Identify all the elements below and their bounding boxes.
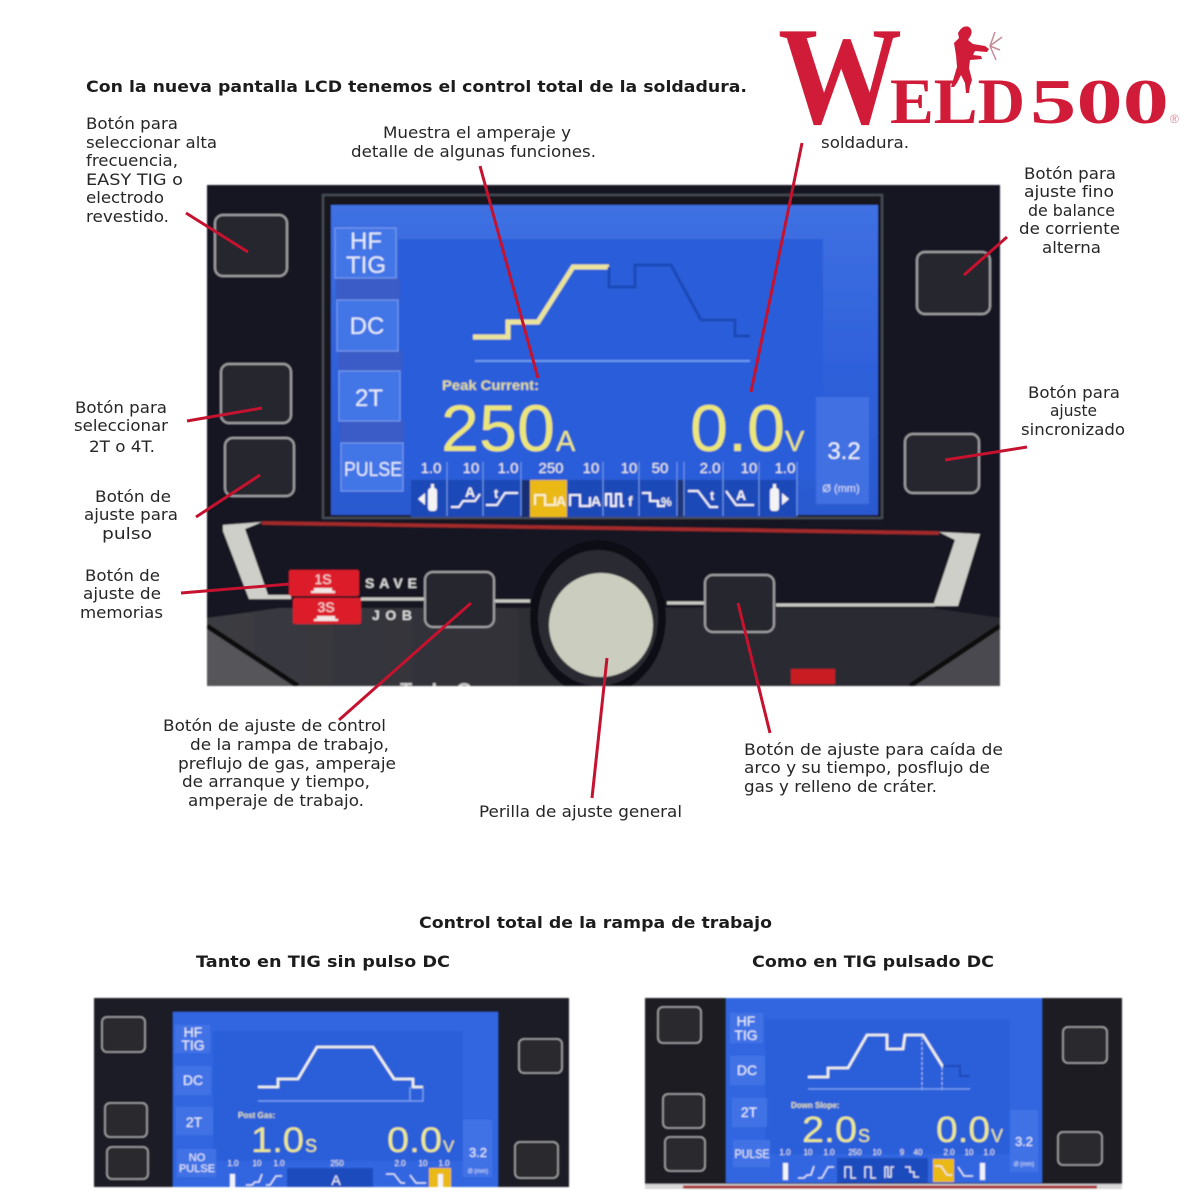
label: synchronized adjust: Botón para: [1028, 383, 1120, 402]
section heading: Control total de la rampa de trabajo: [419, 913, 772, 932]
thumbnail panel: TIG without pulse: 1.0: [227, 1159, 239, 1168]
label: high frequency button: revestido.: [86, 207, 169, 226]
logo: Weld500: ®: [1170, 112, 1179, 126]
thumbnail panel: pulsed TIG: 1.0: [779, 1148, 791, 1157]
save/job button: [425, 572, 494, 627]
thumbnail panel: pulsed TIG: 10: [873, 1148, 882, 1157]
parameter values row: 1.0: [498, 460, 518, 477]
thumbnail panel: pulsed TIG: 40: [914, 1148, 923, 1157]
electrode diameter box: 3.2: [827, 438, 861, 465]
thumbnail panel: pulsed TIG: 3.2: [1015, 1134, 1033, 1149]
label: down slope button: arco y su tiempo, posflujo de: [744, 758, 990, 777]
label: work ramp button: de la rampa de trabajo,: [190, 735, 389, 754]
label: pulse button: Botón de: [95, 487, 171, 506]
welding ramp graph: [473, 265, 750, 361]
thumbnail panel: pulsed TIG: [645, 998, 1122, 1189]
thumbnail panel: TIG without pulse: V: [443, 1137, 455, 1156]
parameter icons row: A: [556, 493, 566, 509]
thumbnail panel: pulsed TIG: V: [991, 1126, 1003, 1146]
parameter icons row: A: [736, 487, 746, 503]
parameter values row: 10: [741, 460, 757, 477]
thumbnail panel: TIG without pulse: A: [331, 1172, 341, 1188]
label: down slope button: Botón de ajuste para caída de: [744, 740, 1003, 759]
parameter values row: 250: [538, 460, 564, 477]
save and job labels: SAVE: [365, 575, 417, 591]
label: high frequency button: [86, 114, 217, 226]
main control panel photo: [207, 185, 1000, 702]
sub heading left: Tanto en TIG sin pulso DC: [196, 952, 450, 971]
parameter values row: 10: [463, 460, 479, 477]
thumbnail panel: TIG without pulse: 2.0: [394, 1159, 406, 1168]
screen mode buttons: DC: [350, 313, 384, 340]
parameter values row: 10: [621, 460, 637, 477]
thumbnail panel: pulsed TIG: 10: [804, 1148, 813, 1157]
label: synchronized adjust: ajuste: [1050, 401, 1097, 420]
parameter values row: 2.0: [700, 460, 720, 477]
label: memory button: Botón de: [85, 566, 160, 585]
thumbnail panel: pulsed TIG: DC: [737, 1062, 757, 1078]
label: high frequency button: electrodo: [86, 188, 164, 207]
label: down slope button: gas y relleno de cráter.: [744, 777, 937, 796]
thumbnail panel: TIG without pulse: S: [305, 1136, 317, 1156]
parameter values row: 10: [583, 460, 599, 477]
side buttons: [215, 215, 990, 496]
label: AC balance button: de balance: [1028, 201, 1115, 220]
label: AC balance button: alterna: [1042, 238, 1101, 257]
label: amperage display: detalle de algunas funciones.: [351, 142, 596, 161]
label: memory button: ajuste de: [83, 584, 161, 603]
lower control strip frame: [223, 522, 980, 606]
thumbnail panel: TIG without pulse: DC: [183, 1072, 203, 1088]
electrode diameter box: [816, 397, 869, 504]
thumbnail panel: TIG without pulse: HF: [184, 1024, 202, 1040]
label: work ramp button: [163, 716, 396, 810]
thumbnail panel: pulsed TIG: 2.0: [802, 1109, 857, 1150]
label: work ramp button: Botón de ajuste de control: [163, 716, 386, 735]
thumbnail panel: pulsed TIG: 1.0: [823, 1148, 835, 1157]
label: amperage display: Muestra el amperaje y: [383, 123, 571, 142]
label: AC balance button: ajuste fino: [1024, 182, 1114, 201]
amperage reading: A: [556, 426, 576, 458]
adjust button: [705, 575, 774, 632]
parameter values row: 1.0: [775, 460, 795, 477]
thumbnail panel: pulsed TIG: 10: [965, 1148, 974, 1157]
screen mode buttons: PULSE: [344, 459, 402, 481]
label: AC balance button: Botón para: [1024, 164, 1116, 183]
parameter icons row: A: [465, 484, 475, 500]
thumbnail panel: TIG without pulse: 2T: [186, 1114, 203, 1130]
thumbnail panel: TIG without pulse: 250: [330, 1159, 344, 1168]
thumbnail panel: pulsed TIG: 2.0: [943, 1148, 955, 1157]
thumbnail panel: TIG without pulse: TIG: [181, 1037, 205, 1053]
thumbnail panel: TIG without pulse: 10: [253, 1159, 262, 1168]
partial model lettering at panel edge: TIG: [400, 680, 472, 702]
label: welding voltage: soldadura.: [821, 133, 909, 152]
thumbnail panel: pulsed TIG: S: [858, 1126, 870, 1146]
LCD screen: [323, 195, 882, 518]
screen mode buttons: 2T: [355, 385, 383, 412]
parameter icons row: f: [628, 493, 633, 509]
logo: Weld500: 500: [1030, 66, 1169, 137]
label: 2T or 4T button: [74, 398, 168, 456]
thumbnail panel: pulsed TIG: TIG: [734, 1027, 758, 1043]
voltage reading: V: [785, 426, 805, 458]
label: high frequency button: Botón para: [86, 114, 178, 133]
screen mode buttons: HF: [350, 228, 382, 255]
knob: [530, 540, 666, 696]
label: general knob: Perilla de ajuste general: [479, 802, 682, 821]
label: amperage display: [351, 123, 596, 161]
parameter icons row: t: [710, 488, 715, 503]
label: memory button: [80, 566, 163, 622]
sub heading right: Como en TIG pulsado DC: [752, 952, 994, 971]
thumbnail panel: TIG without pulse: 3.2: [469, 1145, 487, 1160]
parameter values row: [421, 460, 795, 477]
thumbnail panel: pulsed TIG: HF: [737, 1013, 755, 1029]
thumbnail panel: TIG without pulse: [94, 998, 569, 1188]
logo: Weld500: [778, 0, 1179, 154]
label: AC balance button: de corriente: [1019, 219, 1120, 238]
label: work ramp button: preflujo de gas, amperaje: [178, 754, 396, 773]
thumbnail panel: pulsed TIG: 9: [900, 1148, 905, 1157]
label: work ramp button: de arranque y tiempo,: [182, 772, 370, 791]
thumbnail panel: pulsed TIG: 1.0: [983, 1148, 995, 1157]
electrode diameter box: Ø (mm): [822, 483, 860, 495]
label: pulse button: ajuste para: [84, 505, 178, 524]
thumbnail panel: pulsed TIG: PULSE: [734, 1147, 770, 1161]
annotation leader lines: [181, 143, 1027, 798]
label: pulse button: [84, 487, 178, 543]
thumbnail panel: TIG without pulse: PULSE: [179, 1163, 215, 1175]
voltage reading: 0.0: [690, 391, 785, 465]
red tag: [791, 669, 835, 684]
thumbnail panel: pulsed TIG: Ø (mm): [1014, 1162, 1034, 1168]
parameter icons row: t: [494, 486, 499, 501]
label: memory button: memorias: [80, 603, 163, 622]
thumbnail panel: TIG without pulse: Ø (mm): [468, 1169, 488, 1175]
thumbnail panel: TIG without pulse: NO: [189, 1152, 206, 1164]
label: AC balance button: [1019, 164, 1120, 257]
label: synchronized adjust: [1021, 383, 1125, 439]
screen mode buttons: TIG: [346, 252, 386, 279]
red memory buttons: 3S: [317, 599, 335, 615]
peak current readout: Peak Current:: [442, 377, 539, 393]
label: 2T or 4T button: 2T o 4T.: [89, 437, 155, 456]
parameter values row: 1.0: [421, 460, 441, 477]
thumbnail panel: TIG without pulse: 10: [419, 1159, 428, 1168]
label: 2T or 4T button: seleccionar: [74, 416, 168, 435]
title: Con la nueva pantalla LCD tenemos el control total de la soldadura.: [86, 77, 747, 96]
label: synchronized adjust: sincronizado: [1021, 420, 1125, 439]
label: pulse button: pulso: [102, 524, 152, 543]
logo: Weld500: W: [778, 0, 902, 154]
parameter values row: 50: [652, 460, 668, 477]
parameter icons row: [418, 462, 797, 517]
save and job labels: JOB: [372, 607, 412, 623]
thumbnail panel: pulsed TIG: 2T: [741, 1104, 758, 1120]
label: work ramp button: amperaje de trabajo.: [188, 791, 364, 810]
thumbnail panel: TIG without pulse: 0.0: [387, 1121, 442, 1160]
label: high frequency button: seleccionar alta: [86, 133, 217, 152]
thumbnail panel: pulsed TIG: 250: [848, 1148, 862, 1157]
label: high frequency button: EASY TIG o: [86, 170, 183, 189]
amperage reading: 250: [441, 391, 555, 465]
red memory buttons: 1S: [314, 571, 332, 587]
thumbnail panel: pulsed TIG: 0.0: [936, 1109, 990, 1150]
thumbnail panel: TIG without pulse: 1.0: [273, 1159, 285, 1168]
thumbnail panel: pulsed TIG: Down Slope:: [791, 1101, 839, 1110]
label: high frequency button: frecuencia,: [86, 151, 178, 170]
thumbnail panel: TIG without pulse: 1.0: [438, 1159, 450, 1168]
screen mode buttons: [335, 228, 403, 491]
thumbnail panel: TIG without pulse: Post Gas:: [238, 1111, 275, 1120]
parameter icons row: %: [661, 495, 672, 509]
thumbnail panel: TIG without pulse: 1.0: [251, 1121, 304, 1160]
parameter icons row: A: [591, 493, 601, 509]
label: 2T or 4T button: Botón para: [75, 398, 167, 417]
save and job labels: [365, 575, 417, 623]
red memory buttons: [289, 570, 361, 624]
logo: Weld500: ELD: [890, 66, 1025, 138]
label: down slope button: [744, 740, 1003, 796]
